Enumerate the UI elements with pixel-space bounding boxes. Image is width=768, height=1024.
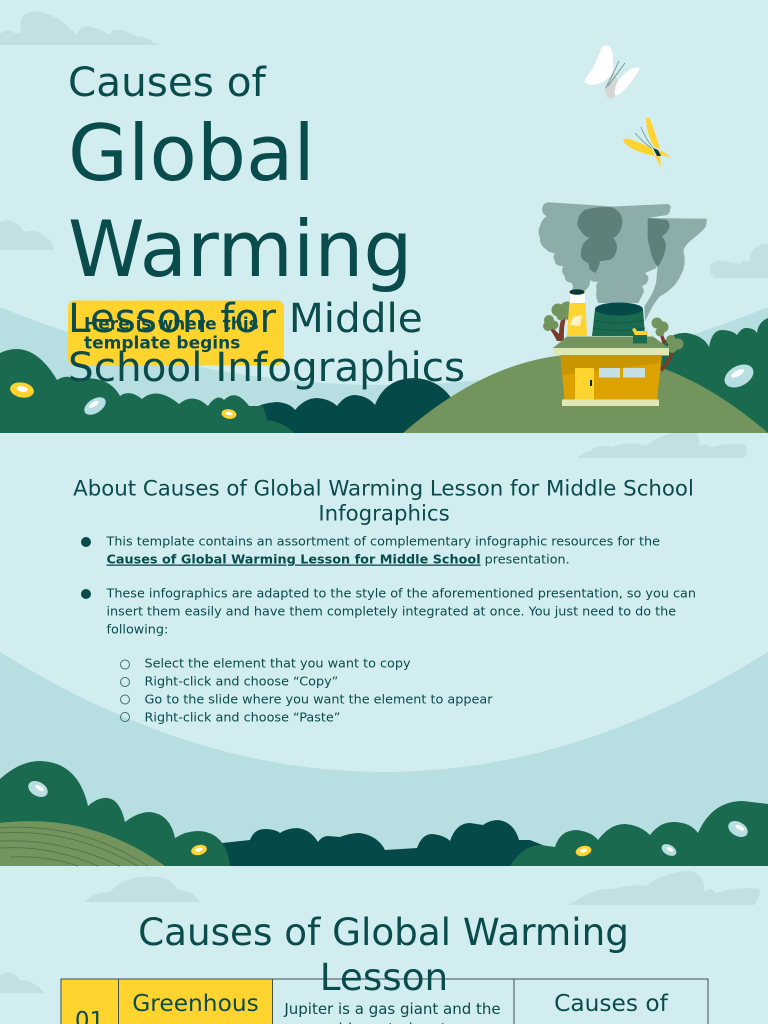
wall shadow: [560, 355, 662, 375]
icon: yellow butterfly: [623, 117, 671, 167]
smoke: right swirl: [644, 218, 707, 321]
icon: yellow berry: [190, 843, 208, 857]
sub list: [120, 656, 493, 726]
walls: [560, 355, 662, 400]
bullet two: insert them easily and have them completely integrated at once. You just need to do the: [106, 604, 676, 620]
smoke: dark swirl: [648, 218, 670, 267]
window right: [623, 368, 645, 378]
roof box: [632, 328, 648, 344]
door handle: [590, 380, 592, 386]
bushes: right green: [510, 801, 768, 866]
panel: about section: [0, 433, 768, 866]
icon: white berry: [25, 778, 51, 800]
icon: factory: [543, 289, 684, 406]
title: School Infographics: [68, 343, 465, 391]
icon: large white berry: [721, 360, 757, 392]
icon: small yellow berry: [221, 408, 237, 420]
panel: cover banner: [0, 11, 768, 433]
background: [0, 433, 768, 866]
sub list: Select the element that you want to copy: [144, 656, 411, 672]
tank: [592, 302, 645, 336]
heading: About Causes of Global Warming Lesson for Middle School: [73, 476, 694, 502]
cloud: right: [710, 244, 768, 278]
cloud: top left: [0, 11, 158, 45]
bullet one: [81, 534, 660, 568]
bullet one: Causes of Global Warming Lesson for Middle School presentation.: [106, 552, 570, 568]
table: Causes of: [554, 990, 669, 1017]
window left: [599, 368, 620, 378]
icon: white berry: [81, 394, 109, 418]
sub list: Right-click and choose “Paste”: [144, 710, 340, 726]
bushes: right green: [660, 318, 768, 433]
heading: Infographics: [318, 502, 450, 526]
sub list: Go to the slide where you want the element to appear: [144, 692, 493, 708]
bushes: left green: [0, 761, 230, 866]
smoke: main plume: [538, 202, 671, 303]
bullet two: following:: [106, 622, 168, 638]
bullet two: These infographics are adapted to the style of the aforementioned presentation, so you can: [106, 586, 696, 602]
light ellipse background: [0, 433, 768, 772]
cloud: about section: [577, 433, 747, 458]
bushes: dark back row: [222, 820, 545, 866]
hill: [403, 354, 768, 433]
callout: template begins: template begins: [84, 334, 240, 354]
right tree: [652, 318, 684, 372]
cloud: right: [568, 871, 760, 905]
icon: yellow berry: [9, 381, 35, 399]
table: [61, 979, 708, 1024]
smoke: dark core: [577, 207, 622, 273]
bullet two: [81, 586, 696, 638]
callout: template begins: Here is where this: [84, 314, 259, 334]
icon: white berry small: [660, 842, 678, 858]
section title: Causes of Global Warming: [138, 910, 629, 954]
sub list: Right-click and choose “Copy”: [144, 674, 338, 690]
bushes: dark back row: [255, 378, 458, 433]
title: [68, 58, 465, 391]
cloud: left: [0, 220, 54, 250]
base: [562, 400, 659, 406]
section title: Lesson: [320, 955, 448, 999]
title: Lesson for Middle: [68, 294, 423, 342]
title: Causes of: [68, 58, 268, 106]
callout: template begins: [68, 300, 284, 366]
roof edge: [553, 348, 669, 356]
table: Greenhous: [132, 990, 259, 1017]
icon: white berry large: [725, 818, 751, 840]
left tree: [543, 302, 576, 341]
door: [575, 368, 594, 400]
section title: [138, 910, 629, 999]
background hill band: [0, 307, 768, 433]
icon: yellow berry right: [575, 844, 592, 858]
bullet one: This template contains an assortment of complementary infographic resources for the: [106, 534, 660, 550]
roof: [553, 336, 669, 348]
chimney: [567, 289, 587, 336]
title: Global: [68, 109, 315, 199]
icon: white butterfly: [585, 45, 640, 99]
heading: [73, 476, 694, 526]
cloud: left: [0, 972, 45, 993]
title: Warming: [68, 205, 413, 295]
cloud: centre: [85, 876, 200, 902]
panel: table section: [0, 871, 760, 1024]
bushes: left green: [0, 349, 294, 433]
hill with furrows: [0, 821, 165, 866]
table: Jupiter is a gas giant and the: [283, 1000, 501, 1018]
